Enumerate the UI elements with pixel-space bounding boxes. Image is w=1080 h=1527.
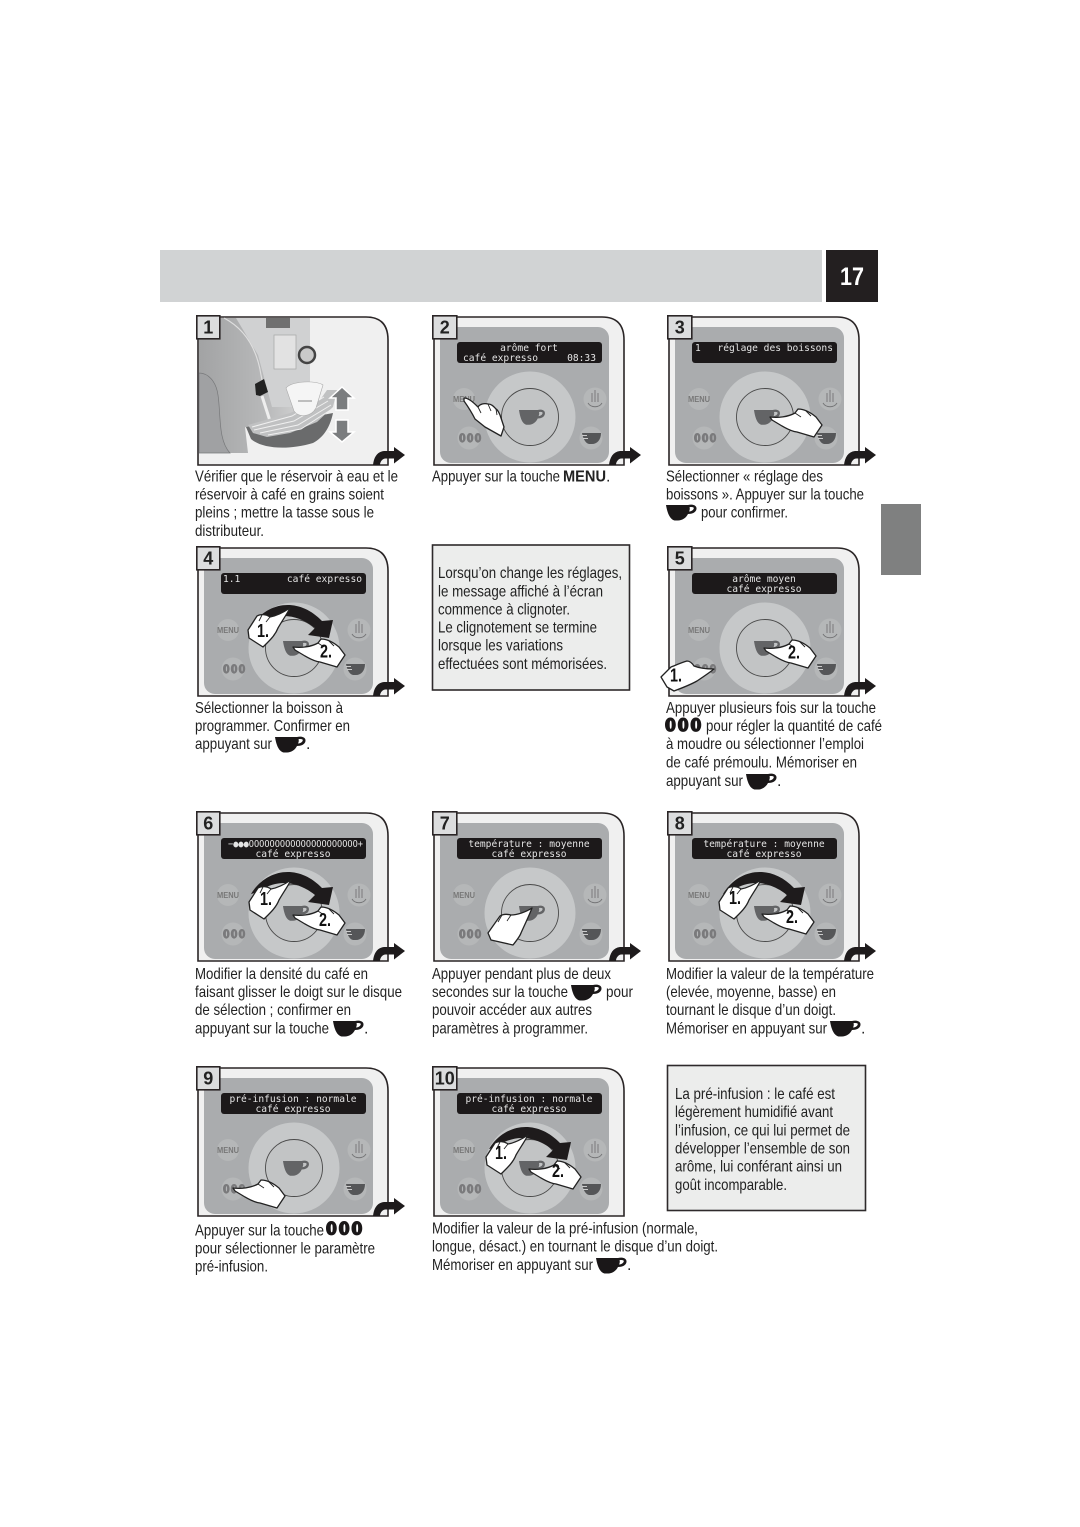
display: café expresso [726, 848, 802, 860]
caption: step 7: pour [606, 984, 634, 1001]
page number box: 17 [840, 263, 864, 291]
hand 1: 1. [260, 889, 272, 909]
page number box [826, 250, 878, 302]
hand on cup [770, 409, 822, 437]
next arrow [844, 943, 876, 961]
panel: step 3: MENU [688, 395, 710, 404]
next arrow [373, 943, 405, 961]
side tab [881, 504, 921, 575]
caption: step 9: pré-infusion. [195, 1258, 268, 1276]
caption: step 1: réservoir à café en grains soient [195, 486, 384, 504]
hand 2: 2. [320, 642, 332, 662]
caption: step 2: . [606, 468, 610, 486]
callout: pre-infusion: goût incomparable. [675, 1177, 787, 1194]
caption: step 5: appuyant sur [666, 773, 744, 790]
caption: step 4: programmer. Confirmer en [195, 718, 350, 735]
panel: step 2: MENU [453, 395, 475, 404]
step number 3 [668, 316, 692, 339]
caption: step 10: longue, désact.) en tournant le disque d’un doigt. [432, 1238, 718, 1256]
step number 8: 8 [675, 814, 685, 834]
panel: step 6 [197, 812, 405, 961]
display [692, 573, 837, 595]
caption: step 4: . [306, 736, 310, 753]
caption: step 10: Mémoriser en appuyant sur [432, 1257, 594, 1274]
callout: settings blink: le message affiché à l’écran [438, 584, 603, 600]
callout: pre-infusion [668, 1066, 866, 1210]
hand on beans button [233, 1180, 285, 1208]
hand 2: 2. [552, 1161, 564, 1181]
panel: step 6: MENU [217, 891, 239, 900]
hand 1: 1. [670, 666, 682, 686]
step number 8 [668, 812, 692, 835]
caption: step 3: boissons ». Appuyer sur la touche [666, 486, 864, 504]
caption: step 7: paramètres à programmer. [432, 1020, 588, 1038]
drip tray [246, 413, 333, 448]
caption: step 10 [432, 1220, 718, 1274]
next arrow [609, 447, 641, 465]
rotation arrow [723, 872, 805, 905]
panel: step 10: MENU [453, 1146, 475, 1155]
display: arôme moyen [732, 573, 796, 585]
caption: step 8: (elevée, moyenne, basse) en [666, 984, 836, 1001]
display [221, 1093, 366, 1115]
display [221, 573, 366, 594]
next arrow [844, 447, 876, 465]
rotation arrow [489, 1127, 571, 1160]
callout: pre-infusion: l’infusion, ce qui lui permet de [675, 1122, 850, 1140]
panel: step 2 [433, 316, 641, 465]
panel: step 4: MENU [217, 626, 239, 635]
rotation arrow [251, 872, 333, 905]
hand 2: 2. [319, 910, 331, 930]
display [692, 342, 837, 363]
caption: step 8: . [861, 1020, 865, 1038]
step number 5 [668, 547, 692, 570]
callout: pre-infusion: arôme, lui conférant ainsi un [675, 1158, 842, 1176]
step number 10: 10 [435, 1068, 455, 1088]
caption: step 3: Sélectionner « réglage des [666, 468, 823, 486]
display: −●●●OOOOOOOOOOOOOOOOOOOOO+ [228, 839, 363, 850]
step number 4 [197, 547, 220, 570]
black spout [255, 379, 268, 396]
caption: step 1: distributeur. [195, 523, 264, 540]
hand pressing MENU [464, 398, 504, 436]
display: température : moyenne [703, 838, 825, 850]
hand 2 [529, 1161, 581, 1189]
hand 2 [764, 640, 816, 668]
panel: step 10 [433, 1067, 624, 1216]
caption: step 8: Modifier la valeur de la température [666, 966, 874, 983]
caption: step 1: Vérifier que le réservoir à eau et le [195, 468, 398, 486]
caption: step 9: pour sélectionner le paramètre [195, 1240, 375, 1258]
panel: step 7: MENU [453, 891, 475, 900]
step number 2: 2 [440, 318, 450, 338]
next arrow [609, 943, 641, 961]
step number 7 [433, 812, 457, 835]
next arrow [373, 678, 405, 696]
callout: settings blink: commence à clignoter. [438, 602, 570, 618]
hand 1 [719, 880, 761, 919]
next arrow [373, 447, 405, 465]
panel: step 9: MENU [217, 1146, 239, 1155]
caption: step 8: tournant le disque d’un doigt. [666, 1002, 836, 1019]
hand 1: 1. [729, 888, 741, 908]
display: café expresso [255, 848, 331, 860]
caption: step 8 [666, 966, 874, 1038]
display: température : moyenne [468, 838, 590, 850]
caption: step 3: pour confirmer. [701, 504, 788, 522]
caption: step 4 [195, 700, 350, 753]
caption: step 7 [432, 966, 634, 1038]
hand 2 [762, 906, 814, 934]
step number 1: 1 [203, 318, 213, 338]
panel: step 8: MENU [688, 891, 710, 900]
caption: step 1 [195, 468, 398, 540]
header bar [160, 250, 822, 302]
step number 9: 9 [203, 1068, 213, 1088]
caption: step 5: de café prémoulu. Mémoriser en [666, 754, 857, 772]
caption: step 6: de sélection ; confirmer en [195, 1002, 351, 1019]
display: 1 [695, 343, 701, 354]
callout: settings blink [432, 545, 630, 690]
next arrow [373, 1198, 405, 1216]
caption: step 5: à moudre ou sélectionner l’emploi [666, 736, 864, 753]
display: pré-infusion : normale [229, 1093, 357, 1105]
caption: step 3 [666, 468, 864, 522]
panel: step 5 [661, 547, 876, 696]
display: café expresso [287, 573, 362, 585]
caption: step 7: pouvoir accéder aux autres [432, 1002, 592, 1019]
display: arôme fort [500, 342, 558, 354]
callout: settings blink: Lorsqu’on change les réglages, [438, 565, 622, 582]
hand 1: 1. [495, 1143, 507, 1163]
display [692, 838, 837, 860]
caption: step 6: faisant glisser le doigt sur le disque [195, 984, 402, 1001]
height arrows [330, 387, 354, 410]
step number 7: 7 [440, 814, 450, 834]
display [457, 1093, 602, 1115]
display: 1.1 [223, 574, 241, 585]
step number 2 [433, 316, 457, 339]
caption: step 5: Appuyer plusieurs fois sur la touche [666, 700, 876, 717]
caption: step 9: Appuyer sur la touche [195, 1222, 324, 1240]
hand 1 [486, 1135, 528, 1174]
hand 1 [661, 661, 714, 691]
caption: step 5: pour régler la quantité de café [706, 718, 882, 735]
step number 6: 6 [203, 814, 213, 834]
next arrow [844, 678, 876, 696]
caption: step 9 [195, 1221, 375, 1276]
callout: settings blink: Le clignotement se termine [438, 620, 597, 636]
display: 08:33 [567, 353, 596, 364]
display [221, 838, 366, 860]
hand 2 [293, 907, 345, 935]
caption: step 7: secondes sur la touche [432, 984, 568, 1001]
caption: step 5 [665, 700, 882, 790]
hand 1 [248, 608, 290, 647]
display: pré-infusion : normale [465, 1093, 593, 1105]
hand long press [488, 908, 532, 945]
step number 3: 3 [675, 318, 685, 338]
display: café expresso [491, 848, 567, 860]
display [457, 838, 602, 860]
panel: step 3 [668, 316, 876, 465]
hand 1: 1. [257, 621, 269, 641]
caption: step 6: . [364, 1020, 368, 1038]
callout: pre-infusion: La pré-infusion : le café est [675, 1086, 835, 1103]
panel: step 5: MENU [688, 626, 710, 635]
panel: step 1 photo [197, 316, 405, 465]
caption: step 6: appuyant sur la touche [195, 1020, 329, 1038]
caption: step 1: pleins ; mettre la tasse sous le [195, 504, 374, 522]
callout: pre-infusion: développer l’ensemble de son [675, 1140, 850, 1158]
caption: step 5: . [777, 773, 781, 790]
step number 1 [197, 316, 220, 339]
caption: step 7: Appuyer pendant plus de deux [432, 966, 611, 983]
panel: step 8 [668, 812, 876, 961]
caption: step 10: Modifier la valeur de la pré-infusion (normale, [432, 1220, 698, 1238]
caption: step 2: Appuyer sur la touche [432, 468, 560, 486]
callout: settings blink: effectuées sont mémorisées. [438, 656, 607, 673]
caption: step 10: . [627, 1257, 631, 1274]
display: réglage des boissons [717, 342, 833, 354]
caption: step 6 [195, 966, 402, 1038]
step number 6 [197, 812, 220, 835]
step number 9 [197, 1067, 220, 1090]
panel: step 4 [197, 547, 405, 696]
callout: settings blink: lorsque les variations [438, 638, 563, 654]
display [457, 342, 602, 364]
display: café expresso [255, 1103, 331, 1115]
caption: step 8: Mémoriser en appuyant sur [666, 1020, 828, 1038]
white cup [286, 382, 323, 416]
callout: pre-infusion: légèrement humidifié avant [675, 1104, 833, 1121]
caption: step 6: Modifier la densité du café en [195, 966, 368, 983]
hand 2 [293, 639, 345, 667]
display: café expresso [463, 352, 538, 364]
display: café expresso [491, 1103, 567, 1115]
caption: step 2: MENU [563, 468, 606, 486]
rotation arrow [251, 605, 333, 638]
display: café expresso [726, 583, 802, 595]
panel: step 7 [433, 812, 641, 961]
step number 5: 5 [675, 548, 685, 568]
hand 2: 2. [788, 642, 800, 662]
caption: step 4: Sélectionner la boisson à [195, 700, 343, 717]
hand 1 [249, 880, 291, 919]
caption: step 4: appuyant sur [195, 736, 273, 753]
step number 4: 4 [203, 548, 213, 568]
hand 2: 2. [786, 907, 798, 927]
panel: step 9 [197, 1067, 405, 1216]
